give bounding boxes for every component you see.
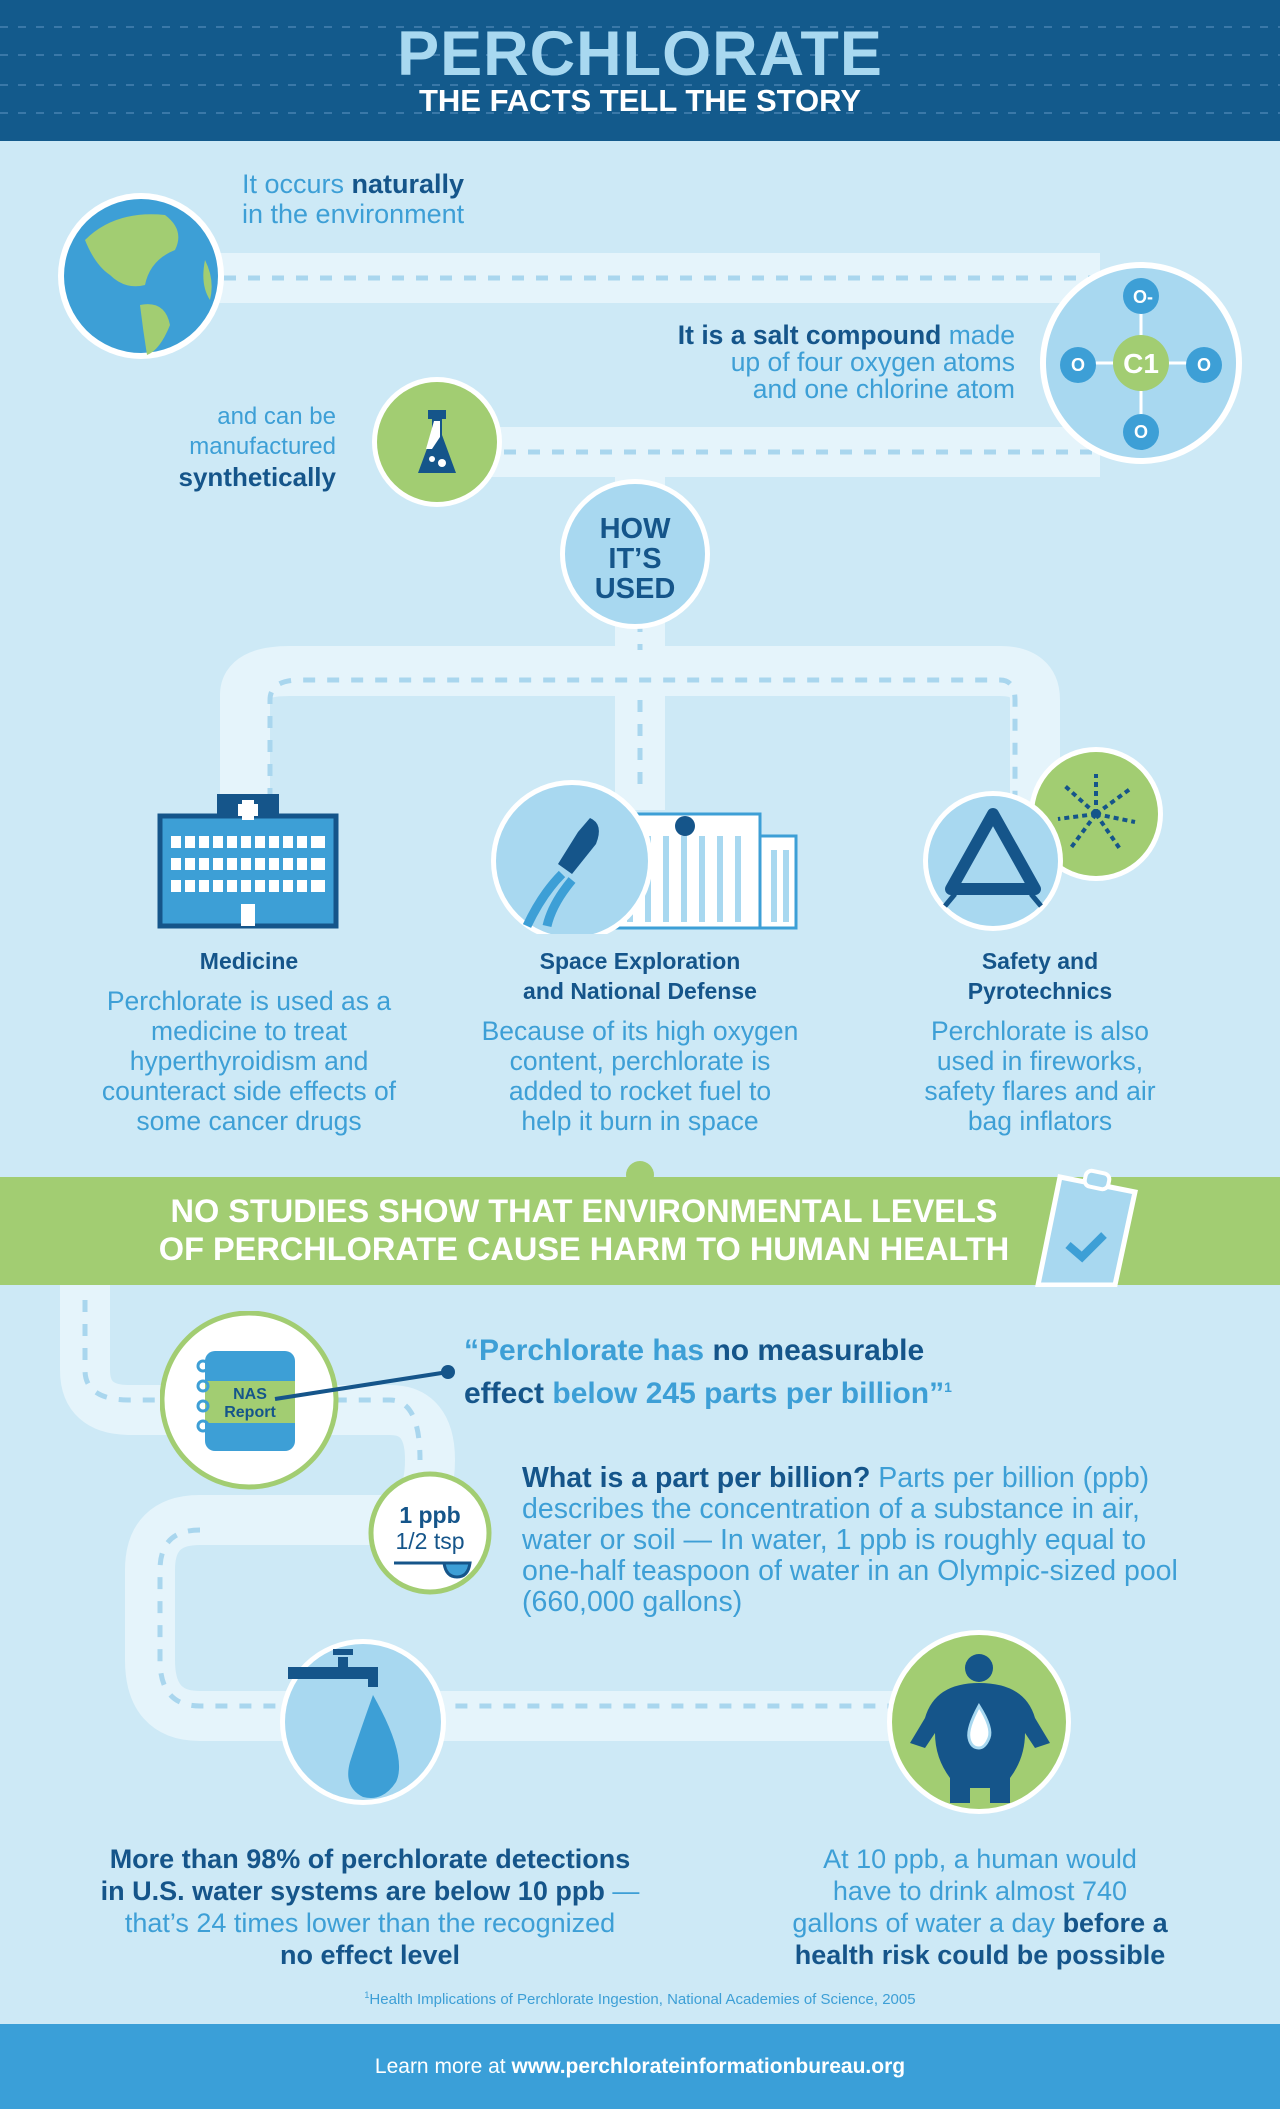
text: ppb: [522, 1462, 1178, 1618]
panel: medicine: Perchlorate is used as a: [107, 986, 391, 1016]
text: synthetically: and can be: [217, 403, 336, 430]
text: naturally: [242, 169, 464, 229]
icon: molecule: O-: [1133, 287, 1153, 307]
panel: safety: Pyrotechnics: [968, 978, 1112, 1004]
icon: molecule: O: [1071, 355, 1085, 375]
quote: [464, 1334, 952, 1410]
text: 740 gallons: At 10 ppb, a human would: [823, 1844, 1137, 1874]
text: ppb: one-half teaspoon of water in an Olympic-sized pool: [522, 1555, 1178, 1587]
quote: “Perchlorate has no measurable: [464, 1334, 924, 1367]
banner text: [159, 1193, 1009, 1267]
text: ppb: (660,000 gallons): [522, 1586, 742, 1618]
text: 98%: that’s 24 times lower than the recognized: [125, 1908, 615, 1938]
how it's used circle: IT’S: [608, 543, 662, 575]
quote: effect below 245 parts per billion”1: [464, 1377, 952, 1410]
panel: medicine: [102, 948, 396, 1136]
text: 98%: in U.S. water systems are below 10 ppb —: [101, 1876, 639, 1906]
text: 740 gallons: gallons of water a day before a: [792, 1908, 1168, 1938]
text: 98%: More than 98% of perchlorate detections: [110, 1844, 630, 1874]
panel: safety: safety flares and air: [924, 1076, 1156, 1106]
how it's used circle: [560, 479, 710, 629]
text: naturally: in the environment: [242, 199, 464, 229]
text: synthetically: [178, 403, 336, 492]
text: salt compound: It is a salt compound made: [678, 320, 1015, 350]
panel: safety: [924, 948, 1156, 1136]
icon: NAS report: [160, 1311, 455, 1490]
panel: space: added to rocket fuel to: [509, 1076, 771, 1106]
panel: space: content, perchlorate is: [510, 1046, 770, 1076]
text: synthetically: synthetically: [178, 462, 336, 492]
icon: 1 ppb: [368, 1472, 492, 1594]
panel: medicine: hyperthyroidism and: [130, 1046, 368, 1076]
panel: safety: Safety and: [982, 948, 1098, 974]
icon: molecule: O: [1134, 422, 1148, 442]
text: ppb: describes the concentration of a substance in air,: [522, 1493, 1140, 1525]
text: salt compound: [678, 320, 1015, 404]
panel: medicine: some cancer drugs: [136, 1106, 362, 1136]
panel: space: [482, 948, 798, 1136]
panel: space: and National Defense: [523, 978, 757, 1004]
icon: NAS report: NAS: [233, 1386, 267, 1403]
icon: person: [887, 1630, 1071, 1814]
icon: molecule: C1: [1123, 348, 1159, 379]
footer: [0, 2024, 1280, 2109]
icon: NAS report: Report: [224, 1404, 276, 1421]
text: 740 gallons: [792, 1844, 1168, 1970]
panel: medicine: medicine to treat: [151, 1016, 347, 1046]
icon: 1 ppb: 1/2 tsp: [395, 1528, 465, 1554]
panel: space: help it burn in space: [521, 1106, 759, 1136]
text: 740 gallons: have to drink almost 740: [833, 1876, 1127, 1906]
banner text: OF PERCHLORATE CAUSE HARM TO HUMAN HEALTH: [159, 1231, 1009, 1267]
icon: molecule: [1040, 262, 1242, 464]
text: salt compound: up of four oxygen atoms: [731, 347, 1015, 377]
icon: 1 ppb: 1 ppb: [399, 1502, 461, 1528]
panel: medicine: counteract side effects of: [102, 1076, 396, 1106]
icon: globe: [58, 193, 224, 359]
icon: hospital: [158, 794, 338, 928]
panel: space: Space Exploration: [540, 948, 740, 974]
how it's used circle: USED: [595, 573, 675, 605]
footnote: 1Health Implications of Perchlorate Ingestion, National Academies of Science, 2005: [364, 1990, 916, 2008]
text: ppb: water or soil — In water, 1 ppb is roughly equal to: [522, 1524, 1146, 1556]
subtitle: THE FACTS TELL THE STORY: [419, 83, 861, 118]
title: PERCHLORATE: [397, 19, 883, 89]
green banner: [0, 1177, 1280, 1285]
text: 98%: no effect level: [280, 1940, 460, 1970]
footer: Learn more at www.perchlorateinformationbureau.org: [375, 2055, 905, 2078]
panel: safety: bag inflators: [968, 1106, 1112, 1136]
text: naturally: It occurs naturally: [242, 169, 464, 199]
text: 98%: [101, 1844, 640, 1970]
text: synthetically: manufactured: [189, 433, 336, 460]
icon: molecule: O: [1197, 355, 1211, 375]
icon: safety triangle + firework: [923, 747, 1163, 931]
icon: building + rocket: [491, 780, 798, 934]
panel: space: Because of its high oxygen: [482, 1016, 798, 1046]
panel: safety: used in fireworks,: [937, 1046, 1143, 1076]
panel: safety: Perchlorate is also: [931, 1016, 1149, 1046]
icon: faucet: [280, 1639, 446, 1805]
panel: medicine: Medicine: [200, 948, 298, 974]
banner text: NO STUDIES SHOW THAT ENVIRONMENTAL LEVELS: [170, 1193, 997, 1229]
text: ppb: What is a part per billion? Parts per billion (ppb): [522, 1462, 1149, 1494]
how it's used circle: HOW: [600, 513, 670, 545]
header: [0, 0, 1280, 141]
icon: flask: [372, 377, 502, 507]
text: 740 gallons: health risk could be possible: [795, 1940, 1165, 1970]
icon: clipboard: [1035, 1168, 1138, 1287]
text: salt compound: and one chlorine atom: [753, 374, 1015, 404]
